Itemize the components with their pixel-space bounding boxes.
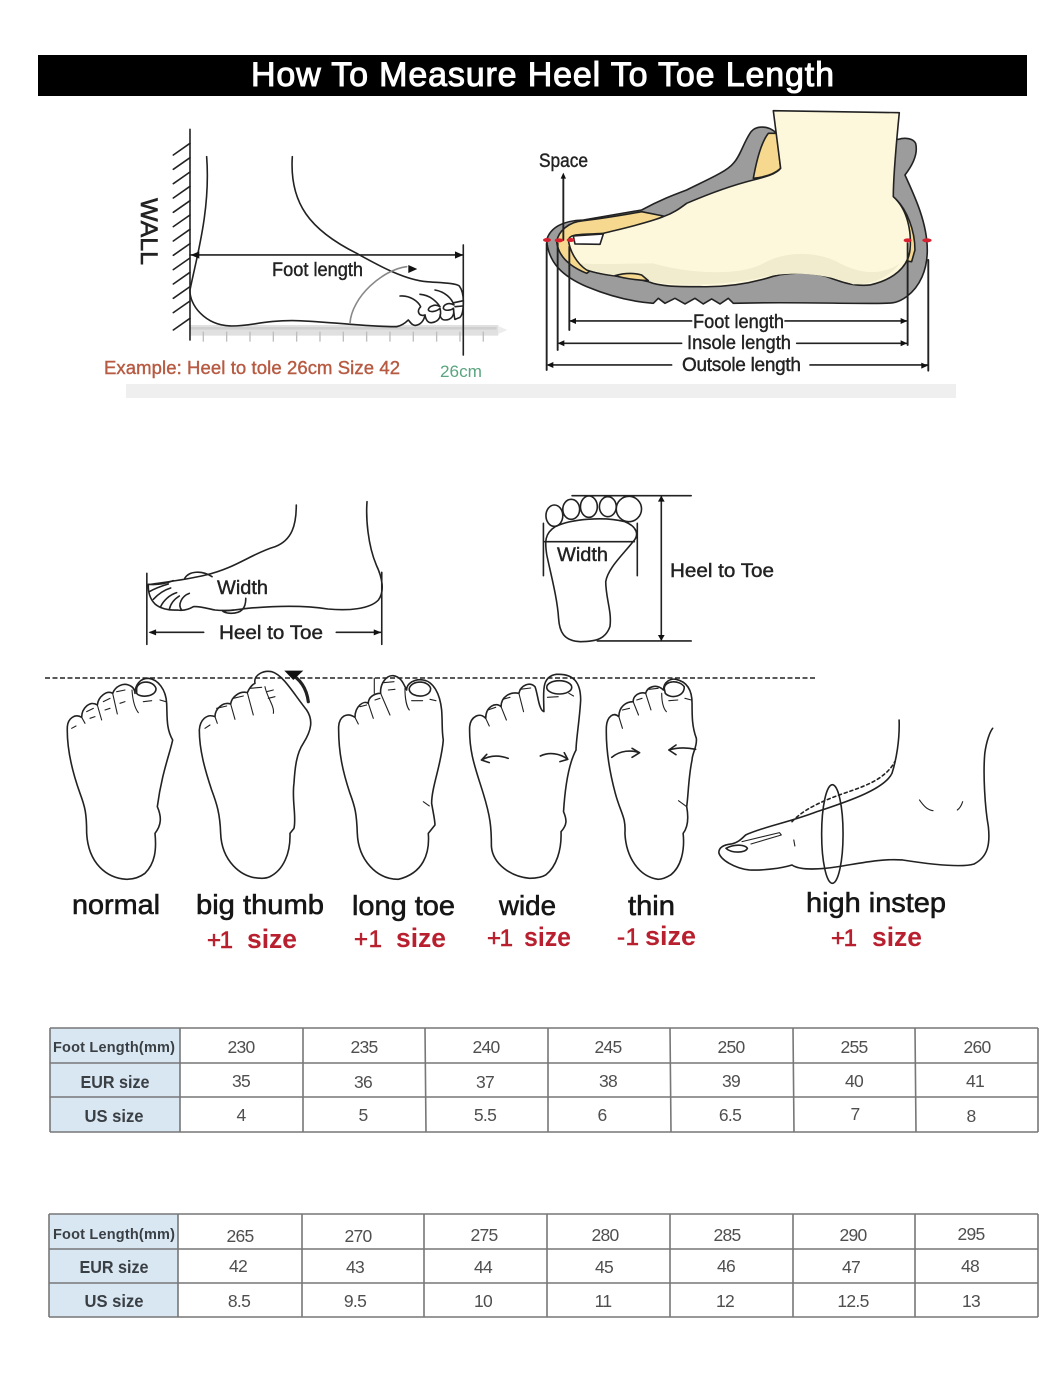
label: WALL: WALL xyxy=(135,198,162,265)
label: big thumb: big thumb xyxy=(196,889,324,920)
insole yellow xyxy=(557,212,663,273)
label: heel to toe: Heel to Toe xyxy=(670,561,774,582)
row values: 7 xyxy=(850,1104,860,1124)
row headers: Foot Length(mm) xyxy=(53,1227,175,1243)
label: +1 size xyxy=(487,922,571,952)
row values: 275 xyxy=(470,1225,498,1245)
label: +1 size: +1 xyxy=(831,925,857,952)
sole shading xyxy=(580,254,900,285)
row values: 12 xyxy=(716,1291,734,1311)
row values: 265 xyxy=(226,1226,254,1246)
label: +1 size xyxy=(207,924,297,954)
row values: 45 xyxy=(595,1257,613,1277)
label: outsole length: Outsole length xyxy=(682,355,801,376)
title banner xyxy=(38,55,1027,96)
row values: 240 xyxy=(472,1037,501,1057)
row values: 39 xyxy=(722,1071,740,1091)
row headers xyxy=(53,1227,175,1311)
row values: 8 xyxy=(966,1106,976,1126)
row headers xyxy=(53,1040,175,1126)
table grid xyxy=(49,1214,1038,1317)
label: +1 size: size xyxy=(872,922,922,952)
row values: 46 xyxy=(717,1256,735,1276)
label: heel to toe: Heel to Toe xyxy=(219,623,323,644)
red markers xyxy=(543,238,932,242)
toes xyxy=(148,581,233,610)
title banner: How To Measure Heel To Toe Length xyxy=(251,56,834,94)
row values: 235 xyxy=(350,1037,378,1057)
row headers: Foot Length(mm) xyxy=(53,1040,175,1056)
toes xyxy=(397,282,463,327)
sole insert xyxy=(615,274,648,281)
label: normal: normal xyxy=(72,889,160,920)
row values: 280 xyxy=(591,1225,620,1245)
label: long toe: long toe xyxy=(352,890,455,921)
row headers: EUR size xyxy=(80,1257,149,1277)
label: +1 size: size xyxy=(524,922,571,952)
table grid xyxy=(50,1028,1038,1132)
row headers: EUR size xyxy=(80,1072,150,1092)
panel: foot type wide xyxy=(470,674,581,952)
label: space: Space xyxy=(539,151,588,172)
row values: 8.5 xyxy=(228,1291,250,1311)
row values: 42 xyxy=(229,1256,247,1276)
row values: 36 xyxy=(354,1072,372,1092)
row values: 48 xyxy=(961,1256,979,1276)
row values: 11 xyxy=(595,1291,611,1311)
ruler xyxy=(190,325,507,342)
label: width: Width xyxy=(217,578,268,599)
row values: 10 xyxy=(474,1291,493,1311)
row values: 250 xyxy=(717,1037,746,1057)
row headers: US size xyxy=(84,1106,144,1126)
panel: foot type high instep xyxy=(719,720,993,952)
row values xyxy=(227,1037,992,1126)
row values: 6 xyxy=(597,1105,607,1125)
row values: 41 xyxy=(966,1071,984,1091)
label: wide: wide xyxy=(498,890,556,921)
row values: 12.5 xyxy=(837,1291,869,1311)
label: high instep: high instep xyxy=(806,887,946,918)
label: foot length: Foot length xyxy=(693,312,784,333)
label: +1 size: +1 xyxy=(487,925,513,952)
panel: foot type long toe xyxy=(339,676,455,953)
foot xyxy=(568,111,910,287)
panel: foot against wall diagram xyxy=(104,129,507,381)
outsole xyxy=(547,127,927,304)
row values: 230 xyxy=(227,1037,256,1057)
panel: sole width diagram xyxy=(543,496,774,642)
row values: 13 xyxy=(962,1291,980,1311)
label: +1 size: size xyxy=(396,923,446,953)
label: -1 size: - 1 xyxy=(617,924,639,951)
label: +1 size: +1 xyxy=(354,926,382,953)
row values: 270 xyxy=(344,1226,373,1246)
row values: 9.5 xyxy=(344,1291,366,1311)
row values: 38 xyxy=(599,1071,617,1091)
label: +1 size: +1 xyxy=(207,927,233,954)
label: 26cm: 26cm xyxy=(440,362,482,381)
panel: foot type normal xyxy=(67,678,173,920)
size table 1 xyxy=(50,1028,1038,1132)
row values: 35 xyxy=(232,1071,250,1091)
row values: 4 xyxy=(236,1105,246,1125)
panel: side foot width diagram xyxy=(147,502,382,644)
row values: 290 xyxy=(839,1225,868,1245)
row values xyxy=(226,1224,985,1311)
row values: 295 xyxy=(957,1224,985,1244)
row values: 44 xyxy=(474,1257,493,1277)
row values: 37 xyxy=(476,1072,494,1092)
row values: 47 xyxy=(842,1257,860,1277)
size table 2 xyxy=(49,1214,1038,1317)
label: insole length: Insole length xyxy=(687,333,791,354)
label: +1 size: size xyxy=(247,924,297,954)
example note: Example: Heel to tole 26cm Size 42 xyxy=(104,357,400,378)
label: foot length: Foot length xyxy=(272,260,363,281)
panel: foot type big thumb xyxy=(196,671,324,954)
row values: 260 xyxy=(963,1037,992,1057)
row values: 6.5 xyxy=(719,1105,741,1125)
label: thin: thin xyxy=(628,890,675,921)
panel: foot type thin xyxy=(606,679,696,951)
row values: 255 xyxy=(840,1037,868,1057)
label: +1 size xyxy=(831,922,922,952)
row values: 285 xyxy=(713,1225,741,1245)
label: -1 size: size xyxy=(645,921,696,951)
wall and foot outline xyxy=(173,129,463,355)
label: +1 size xyxy=(354,923,446,953)
panel: shoe cross-section diagram xyxy=(539,111,932,376)
row values: 5 xyxy=(358,1105,368,1125)
toe gap xyxy=(573,234,603,244)
row headers: US size xyxy=(84,1291,144,1311)
dashed reference line xyxy=(45,677,816,679)
label: -1 size xyxy=(617,921,696,951)
measure lines xyxy=(547,178,928,371)
label: width: Width xyxy=(557,545,608,566)
row values: 245 xyxy=(594,1037,622,1057)
row values: 43 xyxy=(346,1257,364,1277)
row values: 5.5 xyxy=(474,1105,496,1125)
row values: 40 xyxy=(845,1071,864,1091)
divider strip xyxy=(126,384,956,398)
